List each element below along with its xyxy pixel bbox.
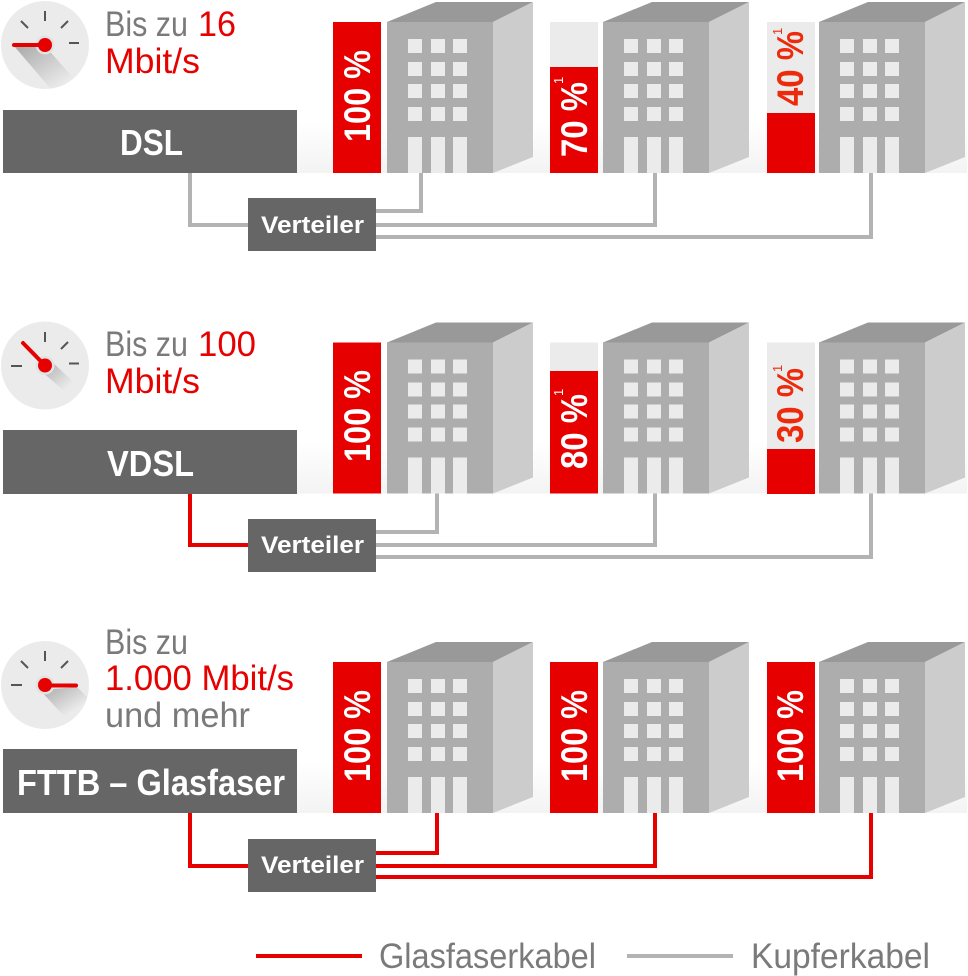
building 3 [819, 642, 965, 813]
building 2 [603, 2, 749, 173]
bar: 80 % [550, 342, 598, 494]
heading: FTTB – Glasfaser: FTTB – Glasfaser [17, 762, 285, 803]
panel: DSL [1, 1, 967, 251]
bar: 100 %: 100 % [337, 690, 378, 782]
icon: speedometer 1.000 Mbit/s [1, 641, 90, 729]
heading: DSL [3, 110, 297, 173]
bar: 80 %: 80 % [554, 394, 595, 469]
speed text: 100 [198, 325, 256, 364]
legend: Glasfaserkabel [379, 937, 596, 976]
distributor [248, 519, 376, 572]
panel: FTTB [1, 623, 967, 892]
speed text [105, 325, 256, 401]
building 2 [603, 642, 749, 813]
speed text: und mehr [105, 696, 250, 735]
heading: VDSL: VDSL [107, 443, 194, 484]
speed text: 1.000 Mbit/s [105, 659, 294, 698]
distributor: Verteiler [261, 212, 364, 239]
icon: speedometer 16 Mbit/s [1, 1, 90, 95]
bar: 80 %: 1 [551, 389, 566, 396]
speed text [105, 5, 236, 81]
bar: 70 %: 70 % [554, 82, 595, 157]
bar: 70 %: 1 [551, 77, 566, 84]
building 3 [819, 2, 965, 173]
fibre cabling [190, 813, 871, 877]
building 1 [387, 2, 533, 173]
bar: 100 %: 100 % [770, 690, 811, 782]
bar: 100 % [333, 662, 381, 813]
bar: 70 % [550, 22, 598, 173]
fibre and copper cabling [190, 493, 871, 557]
bar: 30 % [767, 342, 815, 494]
distributor: Verteiler [261, 852, 364, 879]
speed text: Bis zu [105, 623, 188, 662]
speed text [105, 623, 294, 735]
speed text: 16 [198, 5, 236, 44]
heading: DSL: DSL [120, 122, 183, 163]
bar: 100 % [333, 342, 381, 494]
bar: 40 % [767, 22, 815, 173]
bar: 40 %: 1 [770, 28, 785, 35]
heading: FTTB – Glasfaser [3, 749, 297, 813]
speed text: Mbit/s [105, 362, 200, 401]
copper cabling [190, 173, 871, 237]
bar: 100 % [767, 662, 815, 813]
bar: 30 %: 1 [770, 365, 785, 372]
building 1 [387, 322, 533, 494]
bar: 30 %: 30 % [770, 368, 811, 443]
bar: 100 %: 100 % [337, 370, 378, 462]
speed text: Mbit/s [105, 42, 200, 81]
speed text: Bis zu [105, 5, 188, 44]
distributor [248, 198, 376, 251]
icon: speedometer 100 Mbit/s [1, 322, 89, 410]
building 3 [819, 322, 965, 494]
bar: 40 %: 40 % [770, 31, 811, 106]
bar: 100 %: 100 % [554, 690, 595, 782]
legend [256, 937, 930, 976]
heading: VDSL [3, 430, 297, 494]
distributor [248, 839, 376, 892]
legend: Kupferkabel [751, 937, 930, 976]
bar: 100 % [333, 22, 381, 173]
panel: VDSL [1, 322, 967, 572]
bar: 100 %: 100 % [337, 50, 378, 142]
speed text: Bis zu [105, 325, 188, 364]
bar: 100 % [550, 662, 598, 813]
building 1 [387, 642, 533, 813]
building 2 [603, 322, 749, 494]
distributor: Verteiler [261, 532, 364, 559]
